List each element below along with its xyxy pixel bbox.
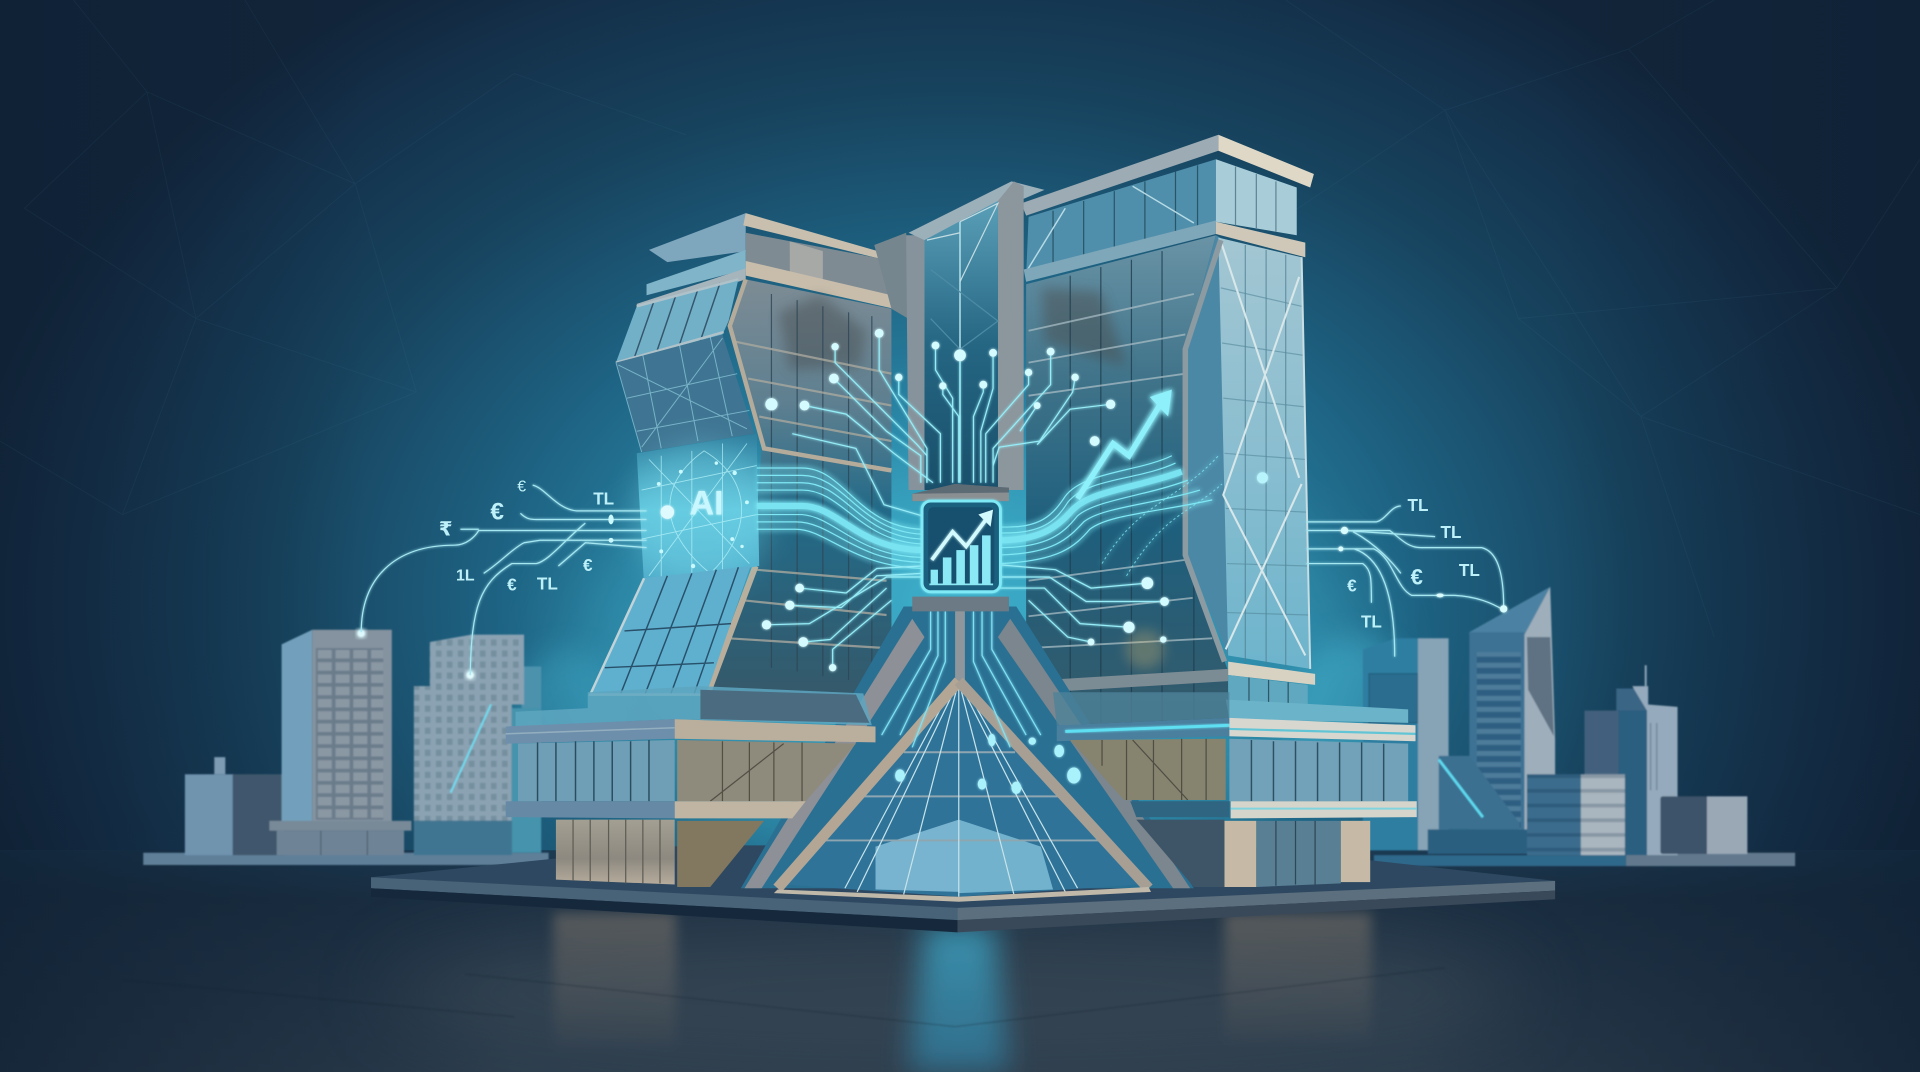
cross bracing [1221,241,1305,655]
left city skyline [143,630,549,865]
building: stepped tower behind [414,635,541,855]
central left pillar [906,235,924,490]
building: spire tower [1584,665,1678,855]
left currency circuit [361,478,647,675]
floor reflection: beige left [553,913,676,1047]
chip housing band [912,493,1009,501]
left currency labels: TL [593,489,614,509]
central glass [924,201,998,490]
floor reflection: central cyan streak [909,925,1009,1072]
circuit top-right traces [960,352,1111,483]
left data stream [757,468,922,568]
right currency circuit [1307,495,1507,657]
circuit bottom-right traces [999,565,1164,642]
right wing lower band [1130,801,1417,818]
left connector nodes [608,515,614,543]
right tower front glass [1026,235,1228,725]
left currency labels: € [507,575,517,595]
left tower roof slab [649,213,887,262]
chip housing bottom [912,597,1009,611]
central right pillar [998,181,1024,490]
left tower lower slanted glass [590,566,751,695]
left wing lower band [506,801,806,818]
chip housing top [912,484,1009,501]
right currency labels [1347,495,1480,631]
floor reflection: beige right [1224,913,1371,1041]
structural beams [744,619,924,888]
left currency labels: € [583,555,593,575]
right currency labels: TL [1441,522,1461,542]
left tower slanted upper glass [616,279,738,363]
central side block [874,233,912,321]
platform [371,845,1555,932]
right tower base band [1228,662,1315,708]
left connector lines [361,485,647,675]
glowing data bundles [757,456,1222,576]
building: tall grid tower [269,630,411,855]
pyramid dots [895,734,1081,794]
chip screen [922,501,1000,592]
building: left tower behind [1363,638,1449,850]
mesh wave [1102,456,1218,564]
building: sharp angled tower [1428,587,1555,854]
left currency labels: € [490,498,504,525]
rising growth arrow [1078,390,1172,499]
left currency labels: 1L [456,568,475,585]
left tower penthouse [637,233,894,314]
circuit lower column traces [882,611,1041,747]
right currency labels: TL [1408,495,1428,515]
ground plate left [143,853,549,865]
left wing ground floor [556,820,764,887]
left currency labels: ₹ [439,518,453,540]
right currency labels: € [1411,564,1423,589]
right tower roof [1021,135,1314,216]
right tower upper-right glass [1216,159,1305,257]
right city skyline [1363,587,1795,866]
AI label: AI [689,485,724,523]
building: small cube [1660,796,1747,854]
holographic AI panel [632,434,769,586]
main building [361,135,1507,902]
floor [0,850,1920,1072]
right connector lines [1307,506,1504,657]
right wing glass [1070,739,1408,801]
circuit lines [762,329,1169,747]
left currency labels [439,478,614,595]
circuit nodes [762,329,1169,671]
right currency labels: € [1347,576,1357,596]
left wing upper band [506,719,876,744]
central column [741,181,1194,888]
left currency labels: TL [537,573,558,593]
right tower side glass column [1185,235,1310,669]
chip trend arrow [932,518,987,560]
right tower [1021,135,1315,725]
circuit bottom-left traces [767,566,922,668]
building: small far-left block [185,757,284,855]
central chip [912,484,1009,611]
right wing ground floor [1136,820,1370,887]
right currency labels: TL [1361,611,1382,631]
AI dot [661,505,674,519]
right connector nodes [1338,527,1507,613]
chip bar chart [931,535,991,584]
right wing upper band [1057,718,1416,741]
right data stream [999,456,1212,564]
left currency labels: € [517,478,526,495]
left tower [590,213,894,698]
central roof [909,181,1044,240]
left wing glass [518,740,856,801]
circuit top-left traces [792,333,959,516]
right currency labels: TL [1459,560,1480,580]
left tower mid dark glass [616,334,754,452]
glow behind building [511,453,1420,870]
ground plate right [1374,855,1626,866]
glass pyramid [774,681,1151,902]
right tower upper-left glass [1024,159,1216,282]
left tower front glass [704,279,891,698]
building: striped low block [1527,774,1625,855]
lower glass behind pyramid [741,606,1194,888]
balcony rail [516,686,1408,727]
lower floors [506,686,1417,887]
